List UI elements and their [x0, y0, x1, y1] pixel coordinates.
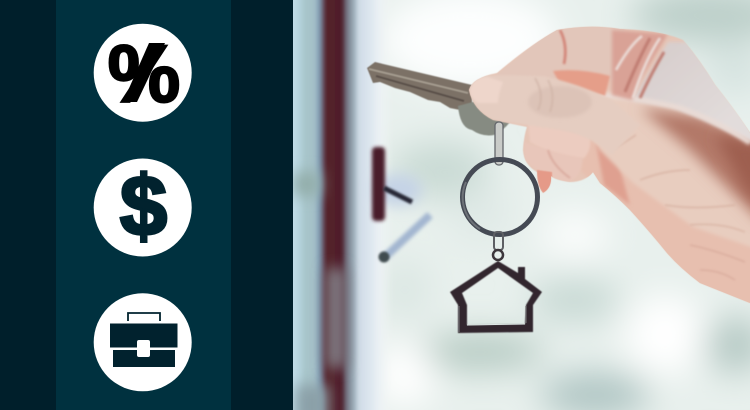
hand: shadow band	[640, 108, 750, 225]
hand: second fingertip	[553, 70, 610, 96]
window frame	[285, 0, 392, 410]
hand: palm lower edge	[586, 172, 750, 303]
house keychain	[450, 261, 542, 333]
hand: finger inner glow	[596, 143, 630, 205]
hand: upper fingers	[524, 26, 624, 52]
icon: dollar: $	[120, 159, 167, 254]
hand: knuckle wrinkles	[612, 30, 668, 100]
window handle	[372, 147, 430, 262]
photo: blurred window background	[292, 0, 750, 410]
hand	[469, 25, 750, 310]
hand: back of hand	[596, 102, 750, 246]
icon: briefcase	[94, 293, 192, 391]
hand: thumb	[469, 76, 624, 150]
key ring	[462, 122, 538, 260]
hand: thumbnail	[470, 78, 501, 102]
key	[367, 62, 510, 135]
hand: wrist top pale skin	[632, 42, 750, 146]
hand: lower fingers	[530, 127, 590, 158]
icon: percent: %	[108, 29, 180, 120]
icon: percent	[94, 24, 192, 122]
left navy panel	[0, 0, 293, 410]
icon: dollar	[94, 158, 192, 256]
